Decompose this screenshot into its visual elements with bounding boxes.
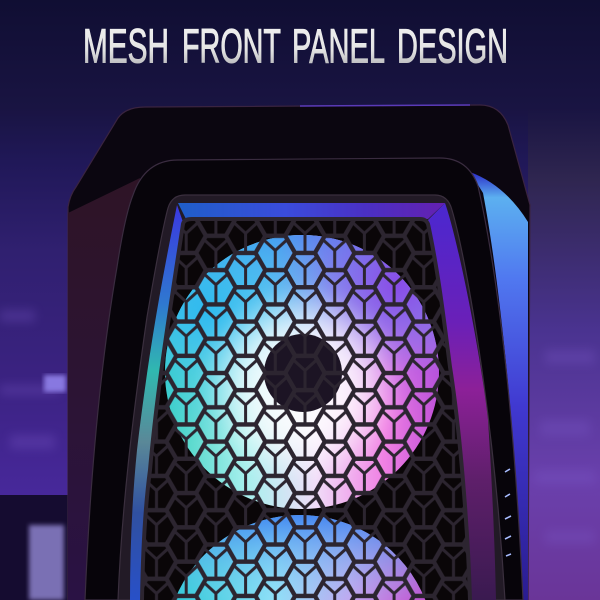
- fan 1: upper RGB fan: [165, 235, 439, 509]
- case: blue light panel on right: [470, 172, 528, 600]
- case: dark middle frame: [85, 158, 523, 600]
- PC case: [68, 105, 530, 600]
- title: MESH: [83, 20, 169, 74]
- case: left side face: [68, 178, 140, 600]
- title: FRONT: [182, 20, 281, 74]
- title: [83, 20, 508, 74]
- mesh grille: [140, 215, 475, 600]
- mesh front panel with fans: [140, 215, 475, 600]
- case: recess top strip: [178, 203, 445, 219]
- case: top edge highlight: [300, 105, 470, 106]
- case: recess right strip: [428, 203, 496, 600]
- title: DESIGN: [397, 20, 508, 74]
- case: recess left strip: [130, 205, 183, 600]
- case: recess frame: [118, 195, 505, 600]
- fan 2: lower RGB fan: [175, 515, 425, 600]
- fan hub: [264, 334, 342, 412]
- mesh outer rim: [142, 219, 470, 600]
- case: outer shell: [68, 105, 530, 600]
- title: PANEL: [292, 20, 385, 74]
- case: status LEDs: [505, 469, 511, 556]
